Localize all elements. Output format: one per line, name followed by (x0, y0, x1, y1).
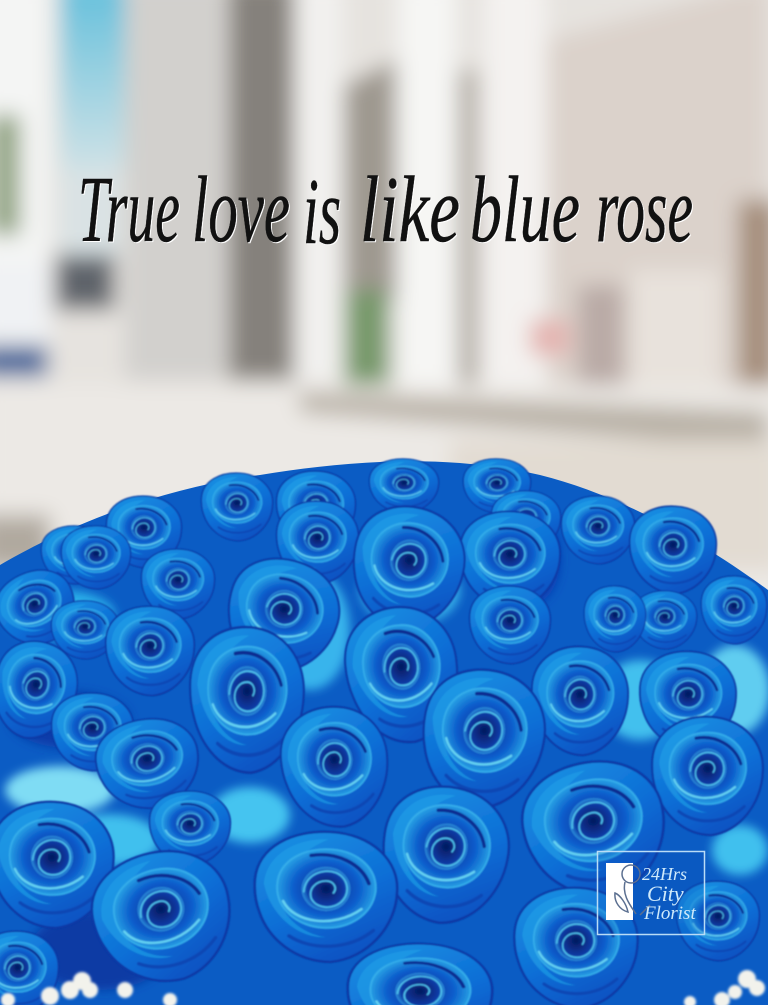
bouquet base (0, 461, 768, 1005)
title: script headline: is (303, 160, 341, 264)
title: script headline (78, 158, 693, 264)
blue rose bouquet (0, 459, 768, 1005)
petal colour patches (5, 515, 768, 990)
title: script headline: rose (596, 158, 693, 262)
logo wordmark: 24Hrs (642, 864, 687, 884)
logo wordmark (642, 864, 696, 924)
baby's breath flowers (1, 970, 765, 1005)
title: script headline: True (78, 158, 180, 262)
title: script headline: love (192, 158, 290, 262)
logo wordmark: Florist (643, 903, 696, 924)
logo frame (598, 852, 704, 934)
title: script headline: like (360, 158, 460, 262)
logo white panel (606, 863, 633, 920)
logo wordmark: City (647, 881, 684, 906)
roses (0, 459, 767, 1005)
logo rose mark (615, 865, 650, 915)
logo: 24Hrs City Florist (598, 852, 704, 934)
title: script headline: blue (470, 158, 580, 262)
